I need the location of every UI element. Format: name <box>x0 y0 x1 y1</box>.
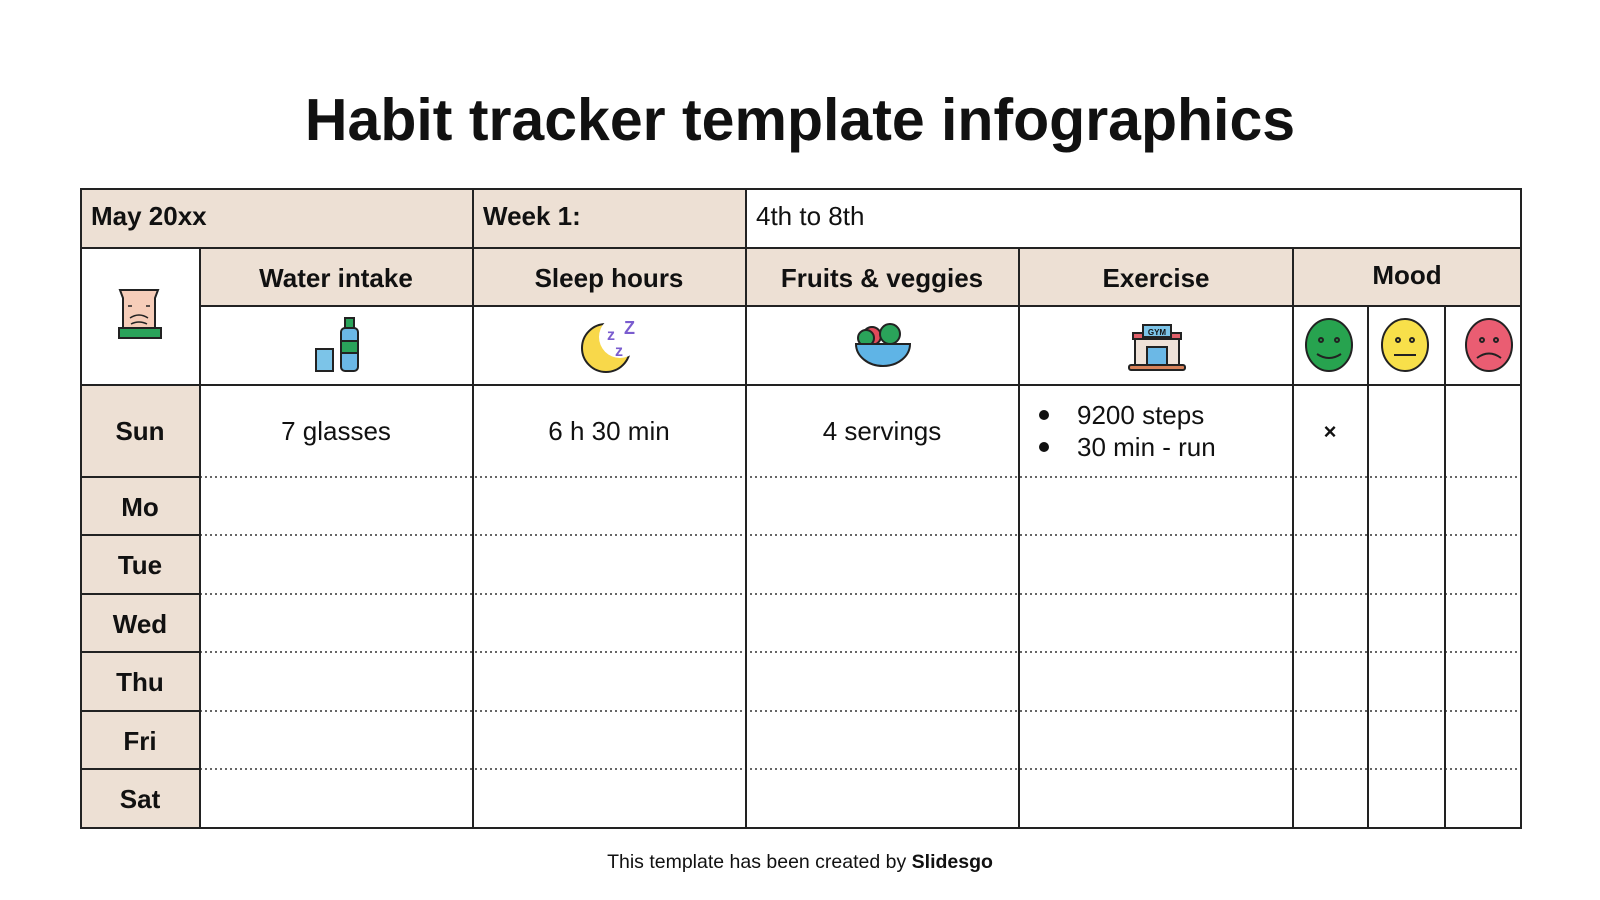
day labels: Sat <box>120 784 161 814</box>
day labels: Wed <box>113 609 167 639</box>
day labels: Thu <box>116 667 164 697</box>
icon: moon: z <box>607 327 615 344</box>
top row labels: 4th to 8th <box>756 201 864 231</box>
footer: This template has been created by Slidesgo <box>607 851 993 873</box>
column headers: Exercise <box>1103 263 1209 293</box>
exercise list: 9200 steps <box>1077 400 1204 430</box>
icon: happy face <box>1306 319 1352 371</box>
column headers: Fruits & veggies <box>781 263 983 293</box>
top row labels <box>91 201 864 231</box>
table <box>81 189 1521 828</box>
icon: sad face <box>1466 319 1512 371</box>
top row labels: May 20xx <box>91 201 207 231</box>
icon: moon: Z <box>624 318 635 338</box>
Sunday entries: 4 servings <box>823 416 941 446</box>
exercise list <box>1039 400 1216 462</box>
column headers: Mood <box>1372 260 1442 290</box>
icon: gym <box>1129 325 1185 370</box>
icon: neutral face <box>1382 319 1428 371</box>
icon: water <box>316 318 358 371</box>
Sunday entries: × <box>1324 419 1336 444</box>
Sunday entries: 7 glasses <box>281 416 391 446</box>
header backgrounds <box>81 189 1521 828</box>
day labels: Fri <box>123 726 157 756</box>
icon: moon <box>582 316 641 372</box>
column headers <box>259 260 1442 293</box>
day labels: Mo <box>121 492 159 522</box>
icon: body <box>119 290 161 338</box>
column headers: Sleep hours <box>535 263 683 293</box>
top row labels: Week 1: <box>483 201 581 231</box>
day labels: Sun <box>115 416 165 446</box>
Sunday entries <box>281 416 1336 446</box>
title: Habit tracker template infographics <box>305 87 1295 153</box>
exercise list: 30 min - run <box>1077 432 1216 462</box>
column headers: Water intake <box>259 263 413 293</box>
dotted row separators <box>200 477 1521 769</box>
Sunday entries: 6 h 30 min <box>548 416 670 446</box>
day labels <box>113 416 167 814</box>
icon: salad bowl <box>856 324 910 366</box>
day labels: Tue <box>118 550 162 580</box>
text: GYM <box>1148 328 1166 337</box>
icon: moon: z <box>615 343 623 360</box>
